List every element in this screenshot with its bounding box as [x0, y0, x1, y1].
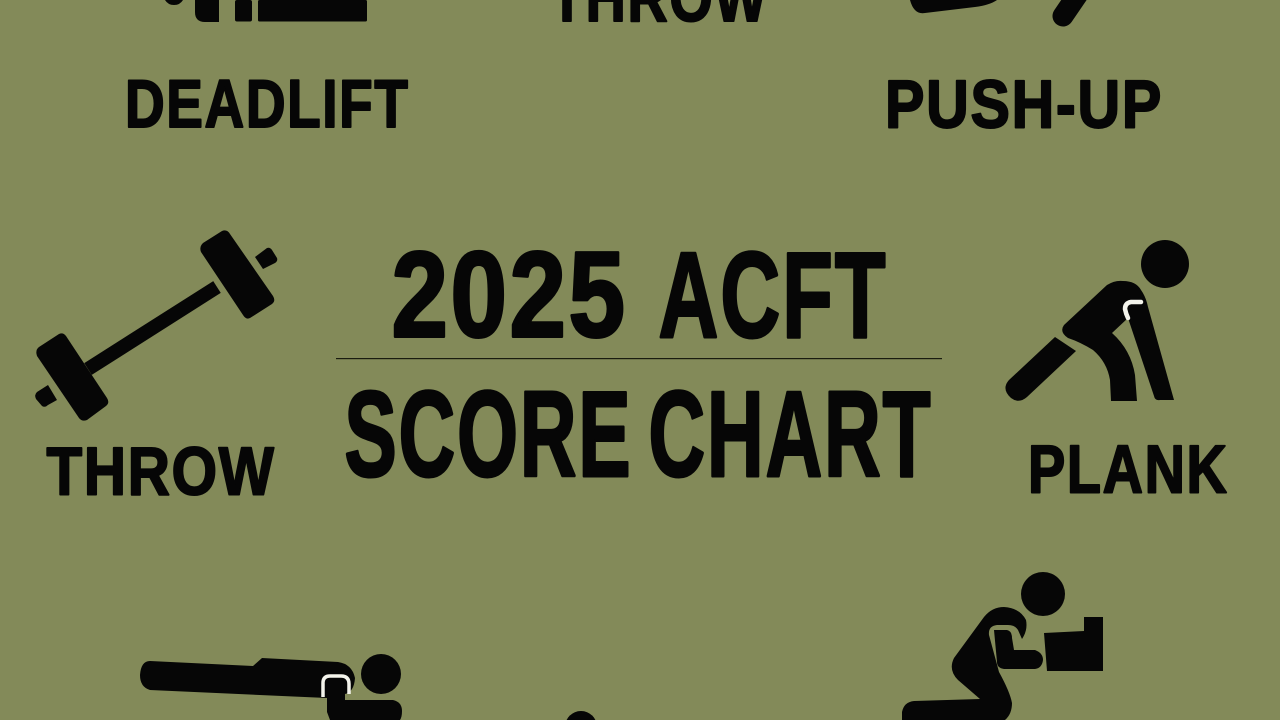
title: line one: ACFT [658, 227, 888, 363]
icon: push-up figure (cropped at top) [910, 0, 1078, 16]
label: deadlift: DEADLIFT [125, 66, 410, 142]
title: line one: 2025 [392, 226, 628, 362]
icon: box-lift figure (cropped at bottom) [902, 572, 1103, 720]
icon: bottom centre head (cropped at bottom) [565, 711, 597, 720]
icon: barbell [35, 230, 277, 421]
label: plank: PLANK [1028, 432, 1228, 508]
icon: deadlift figure (cropped at top) [165, 0, 367, 22]
title [336, 226, 942, 502]
title: line two: CHART [648, 366, 932, 502]
icon: prone figure (cropped at bottom) [140, 654, 402, 720]
icon: plank figure [1005, 240, 1189, 401]
label: left throw: THROW [46, 434, 276, 510]
title: line one [392, 226, 888, 363]
title: line two: SCORE [344, 366, 632, 502]
label: push-up: PUSH-UP [885, 66, 1163, 142]
